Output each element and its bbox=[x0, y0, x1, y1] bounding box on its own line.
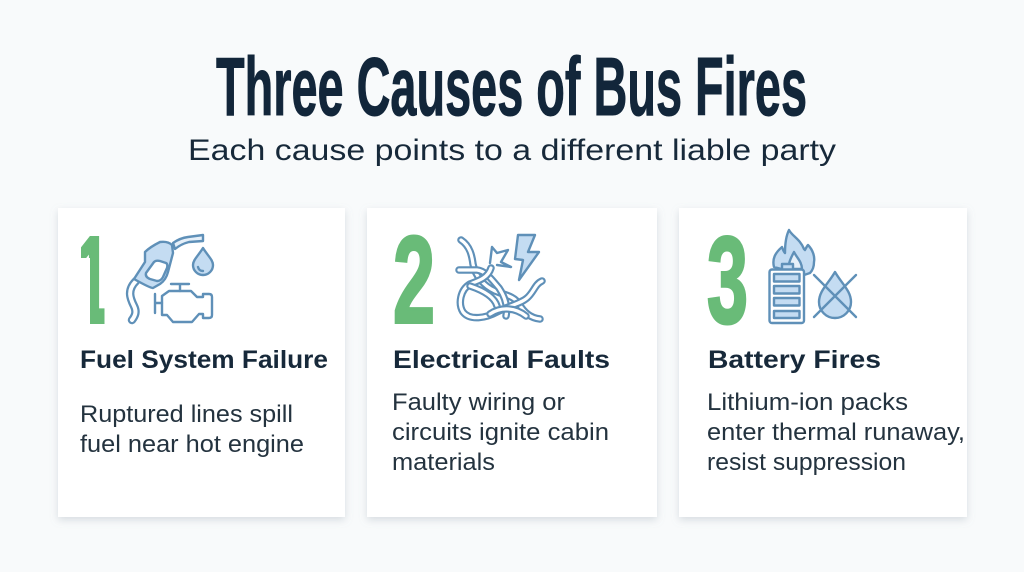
description bbox=[707, 389, 965, 476]
number 1: 1 bbox=[75, 212, 110, 350]
panel: electrical faults bbox=[367, 208, 657, 517]
description bbox=[392, 389, 609, 476]
description: Faulty wiring or bbox=[392, 389, 565, 416]
subtitle: Each cause points to a different liable party bbox=[188, 134, 836, 167]
panel: battery fires bbox=[679, 208, 967, 517]
description: enter thermal runaway, bbox=[707, 419, 965, 446]
description: Ruptured lines spill bbox=[80, 401, 293, 428]
number 2: 2 bbox=[393, 212, 435, 350]
icon: burning battery and crossed-out water drop bbox=[770, 230, 856, 323]
number 3: 3 bbox=[707, 212, 748, 350]
description: resist suppression bbox=[707, 449, 906, 476]
description: fuel near hot engine bbox=[80, 431, 304, 458]
description bbox=[80, 401, 304, 458]
heading: Battery Fires bbox=[708, 346, 881, 374]
icon: tangled wires, spark and lightning bolt bbox=[459, 235, 542, 319]
description: circuits ignite cabin bbox=[392, 419, 609, 446]
heading: Electrical Faults bbox=[393, 346, 610, 374]
icon: fuel nozzle, drop and engine bbox=[130, 235, 213, 322]
heading: Fuel System Failure bbox=[80, 346, 328, 374]
description: materials bbox=[392, 449, 495, 476]
description: Lithium-ion packs bbox=[707, 389, 908, 416]
panel: fuel system failure bbox=[58, 208, 345, 517]
